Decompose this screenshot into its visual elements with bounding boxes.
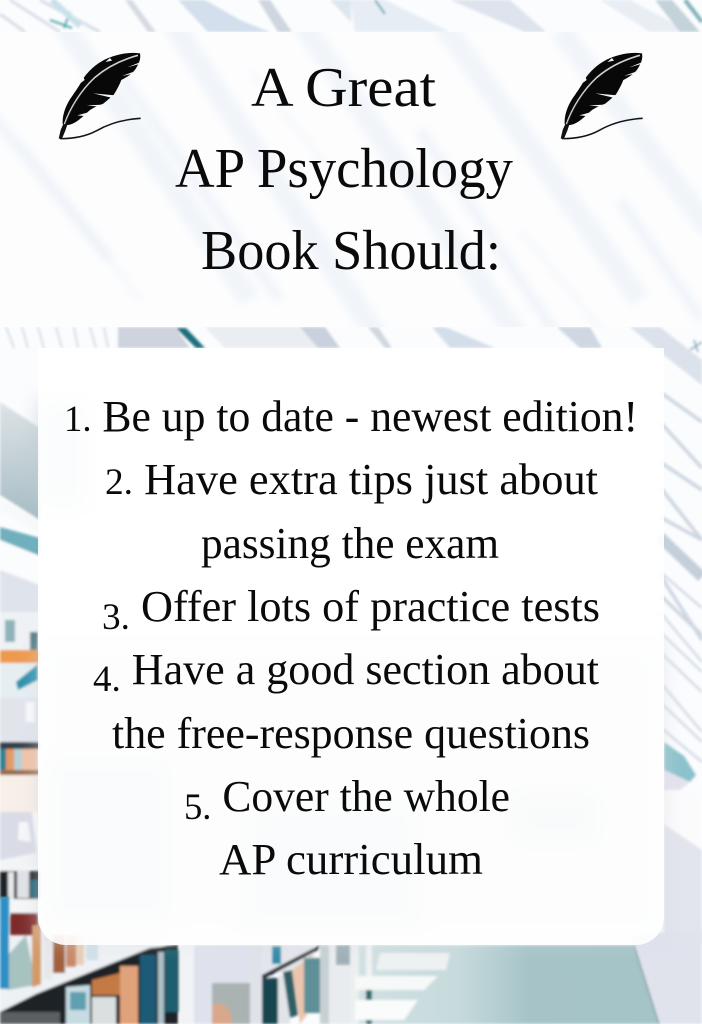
panel: title backdrop — [0, 20, 702, 340]
item 5: AP curriculum — [219, 835, 483, 884]
title: AP Psychology — [175, 138, 513, 200]
left ceiling and shelves — [0, 402, 40, 953]
item 4: the free-response questions — [112, 709, 590, 758]
middle band shapes — [6, 327, 108, 348]
item 2: 2. Have extra tips just about — [105, 455, 598, 504]
bottom shelves, column and floor — [0, 897, 702, 1024]
item 4: 4. — [93, 659, 121, 700]
item 4: Have a good section about — [121, 645, 599, 694]
right window stripes — [660, 392, 702, 640]
item 4 — [93, 645, 599, 758]
item 2 — [105, 455, 598, 568]
right wall — [664, 790, 702, 850]
title: Book Should: — [201, 220, 501, 282]
title: A Great — [251, 57, 436, 119]
icon: left quill — [59, 53, 141, 139]
title — [175, 57, 513, 282]
item 3: 3. — [102, 597, 130, 638]
faint shapes seen through lower panel — [38, 400, 664, 940]
item 2: passing the exam — [201, 519, 499, 568]
books above lower shelf — [0, 935, 180, 1004]
item 3: Offer lots of practice tests — [130, 582, 600, 631]
icon: right quill — [561, 53, 643, 139]
item 1: 1. Be up to date - newest edition! — [64, 392, 638, 441]
item 5: 5. — [184, 787, 211, 828]
item 5 — [184, 772, 510, 884]
item 5: Cover the whole — [211, 772, 510, 821]
top band shapes — [178, 0, 270, 32]
list of five criteria — [64, 392, 638, 884]
panel: list backdrop — [38, 348, 664, 945]
